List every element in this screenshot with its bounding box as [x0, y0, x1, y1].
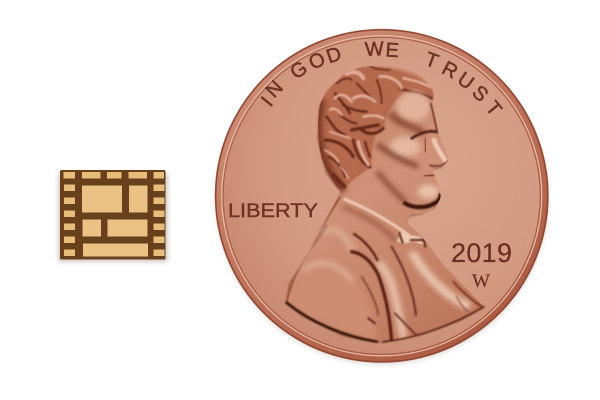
bow tie highlight — [397, 232, 425, 245]
hair shadow band — [318, 103, 342, 188]
hair highlights — [325, 72, 430, 178]
chip artwork — [60, 170, 166, 260]
hair dark locks — [325, 67, 432, 187]
collar shadow — [343, 207, 395, 240]
bust base shadow — [287, 303, 377, 342]
eye line — [424, 136, 426, 154]
chip — [58, 170, 168, 262]
chip top edge pads — [64, 172, 164, 178]
hair mass — [317, 67, 434, 190]
coin rim — [215, 29, 549, 363]
relief details clipped to bust — [287, 67, 482, 342]
face — [378, 92, 449, 207]
coin grain — [224, 38, 540, 354]
chip shadow — [58, 173, 168, 262]
hair — [317, 67, 434, 190]
liberty text: LIBERTY — [228, 201, 318, 222]
beard highlight — [418, 184, 439, 199]
left back edge — [287, 197, 340, 302]
neck cord shadow — [408, 216, 413, 222]
nose underside — [430, 161, 449, 166]
chest highlight — [380, 265, 403, 337]
bust silhouette — [287, 66, 484, 342]
motto text: IN GOD WE TRUST — [257, 38, 506, 121]
beard underside — [405, 195, 441, 207]
portrait — [285, 66, 484, 343]
rim dark edge — [216, 30, 548, 362]
upper back highlight — [323, 230, 352, 248]
chip body — [60, 170, 166, 260]
bow tie — [397, 232, 425, 247]
coin shadow — [215, 31, 549, 365]
chip large centre pads — [82, 186, 148, 256]
cheek highlight — [390, 137, 420, 157]
forehead profile shadow — [431, 103, 437, 133]
coat — [287, 197, 482, 342]
eye socket — [412, 131, 436, 138]
jaw shadow — [378, 173, 405, 202]
bust lower edge — [383, 307, 484, 342]
year text: 2019 — [451, 238, 512, 268]
mint mark: W — [472, 271, 490, 292]
chip right edge pads — [154, 184, 164, 256]
coat lower left tone — [321, 292, 376, 338]
coin field — [223, 37, 540, 354]
collar highlight — [345, 199, 408, 235]
chip left edge pads — [64, 184, 75, 256]
cheek shadow — [378, 145, 417, 166]
penny — [215, 29, 549, 365]
coat fold shadows — [312, 225, 482, 342]
shirt front highlight — [413, 255, 467, 305]
moustache shadow — [423, 174, 435, 176]
temple shadow — [392, 115, 422, 132]
bow tie creases — [399, 233, 425, 247]
temple highlight — [397, 92, 430, 122]
shoulder highlight — [305, 263, 352, 280]
rim highlight — [222, 36, 542, 356]
bust relief shadow — [285, 66, 483, 343]
nose highlight — [434, 140, 445, 160]
field inner ring — [223, 37, 540, 354]
